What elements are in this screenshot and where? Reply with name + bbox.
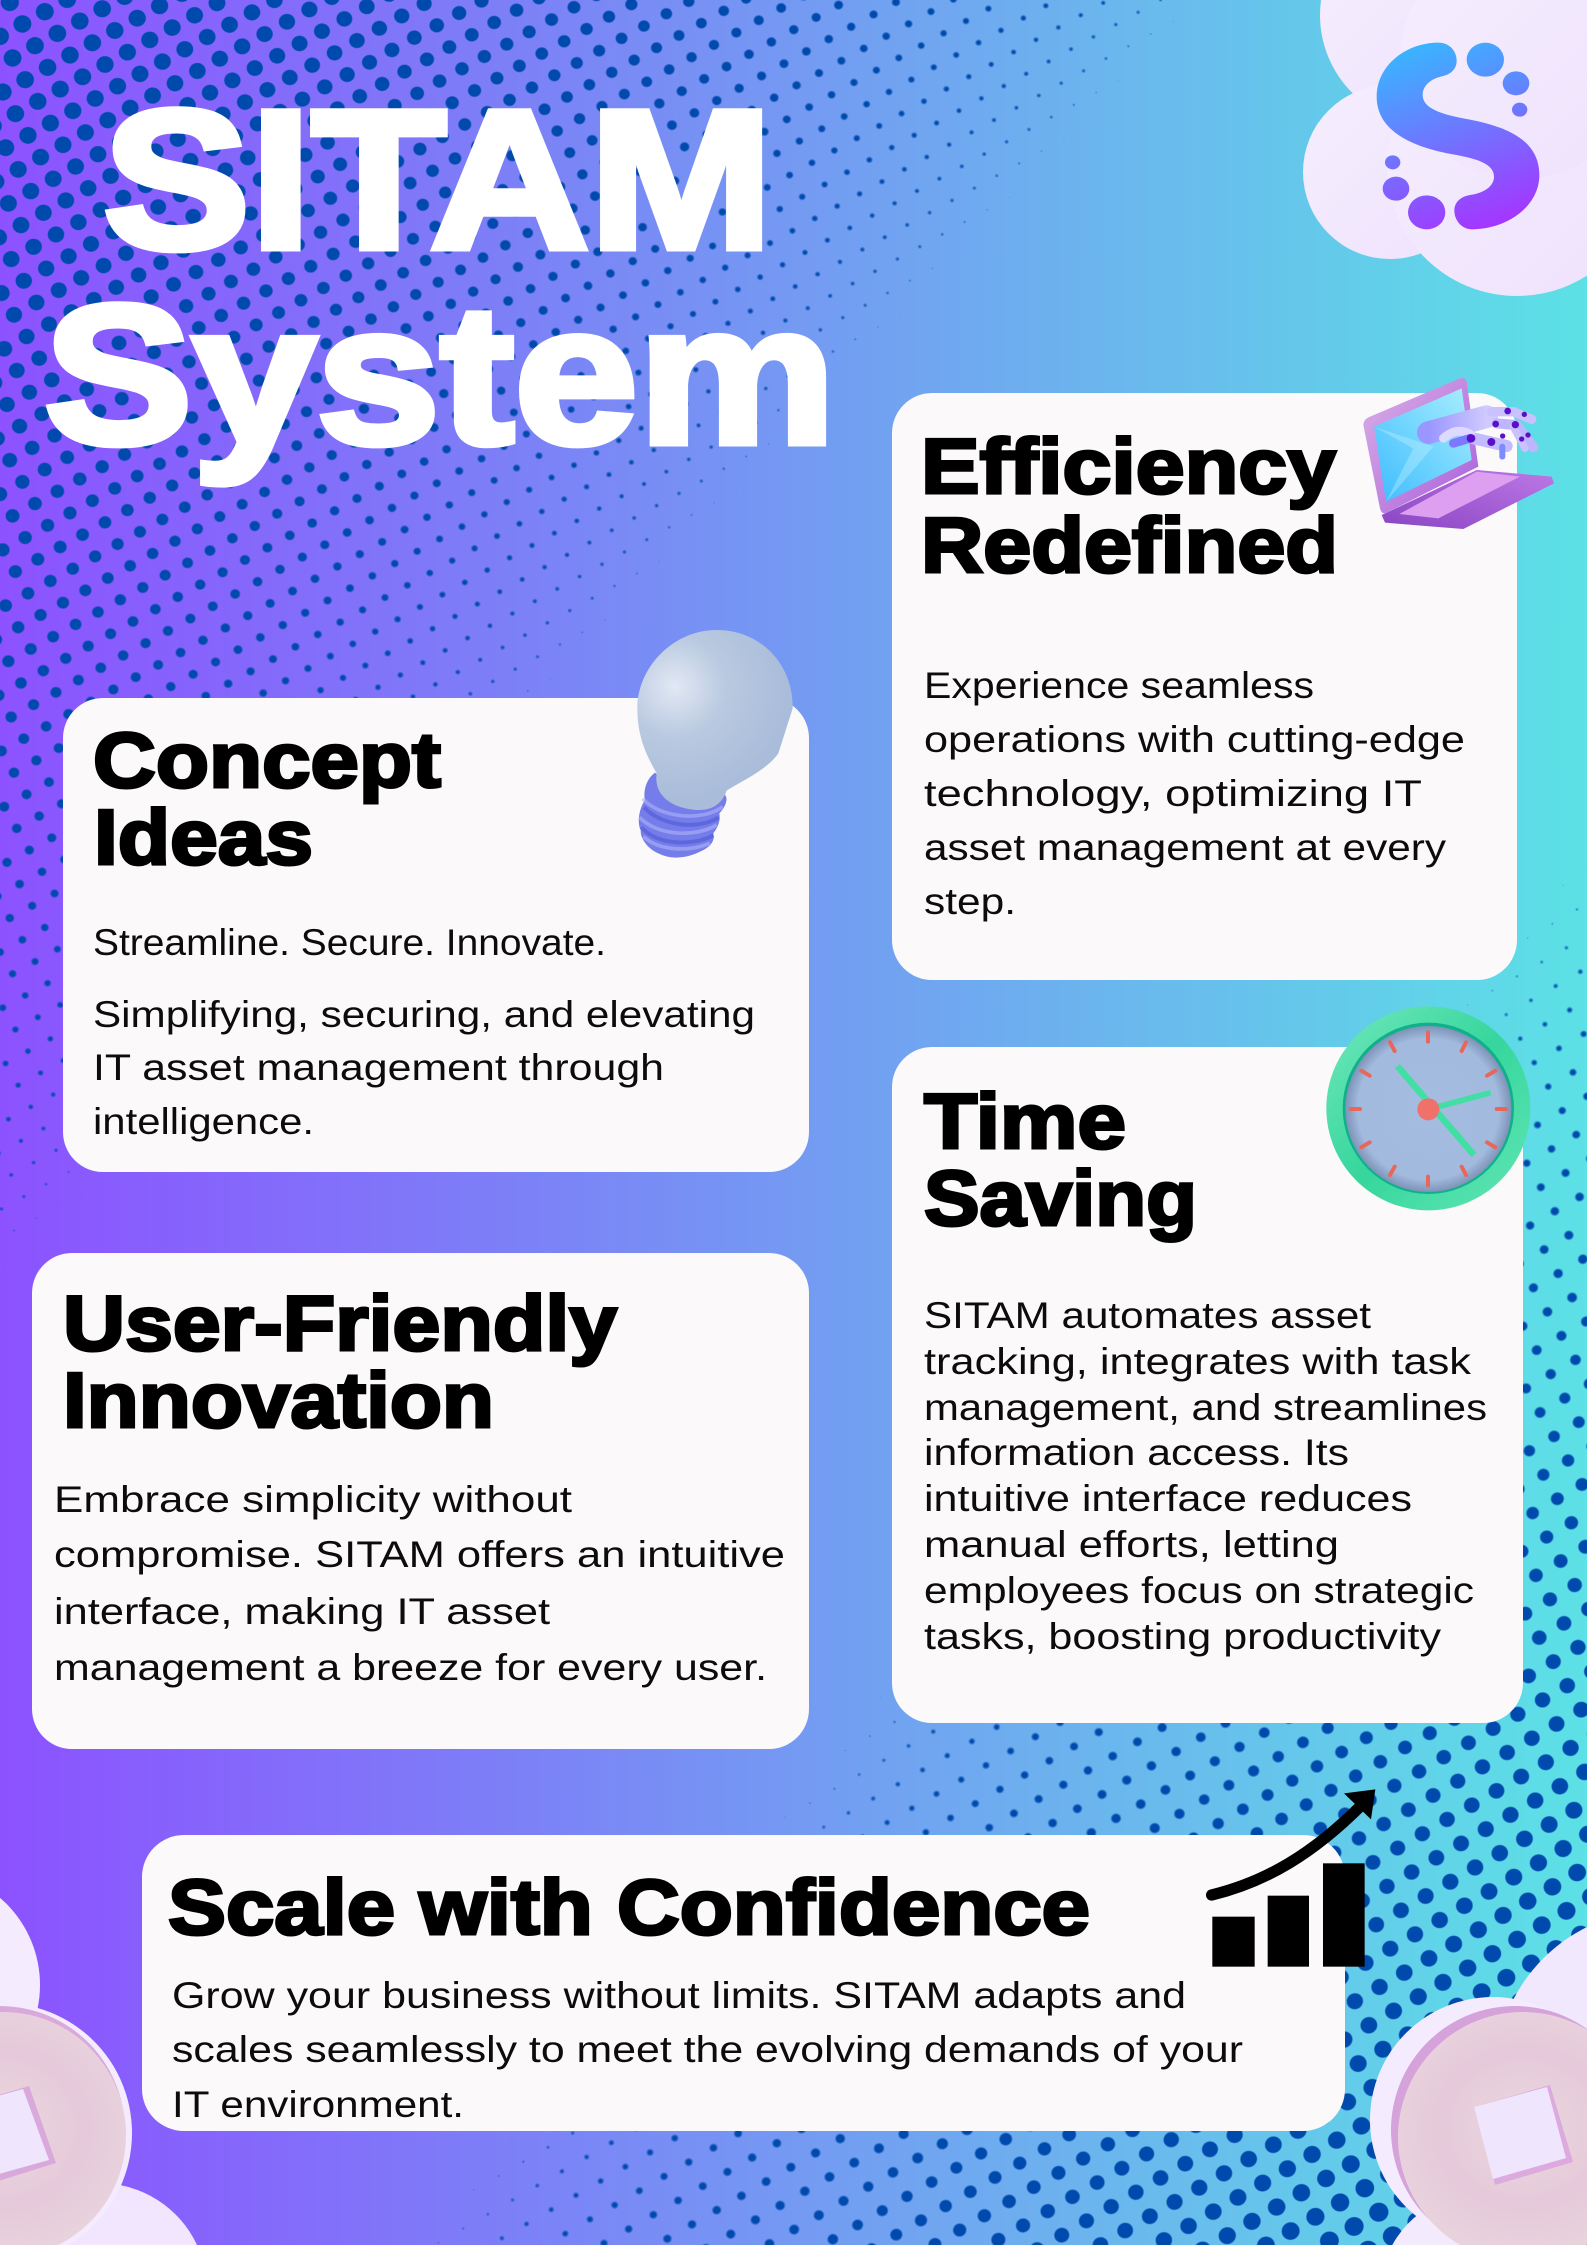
heading: concept ideas: Concept	[93, 716, 441, 804]
text: time saving body: SITAM automates asset	[924, 1295, 1372, 1336]
text: efficiency body: technology, optimizing IT	[924, 773, 1422, 814]
heading: concept ideas	[93, 716, 441, 881]
heading: concept ideas: Ideas	[94, 793, 313, 881]
panel: efficiency redefined	[892, 393, 1517, 980]
heading: user-friendly innovation: Innovation	[63, 1356, 494, 1444]
text: time saving body	[924, 1295, 1487, 1657]
heading: user-friendly innovation: User-Friendly	[63, 1279, 617, 1367]
text: scale body: IT environment.	[172, 2084, 464, 2125]
heading: scale with confidence: Scale with Confidence	[168, 1863, 1090, 1951]
text: efficiency body	[924, 665, 1465, 922]
text: time saving body: information access. Its	[924, 1432, 1349, 1473]
text: user-friendly body: management a breeze for every user.	[54, 1647, 767, 1688]
heading: time saving	[924, 1077, 1197, 1242]
logo badge	[1303, 0, 1587, 296]
logo cloud	[1303, 0, 1587, 296]
title: System	[44, 264, 836, 485]
text: time saving body: employees focus on strategic	[924, 1570, 1474, 1611]
heading: time saving: Saving	[924, 1154, 1197, 1242]
text: time saving body: tasks, boosting productivity	[924, 1616, 1442, 1657]
text: scale body: Grow your business without limits. SITAM adapts and	[172, 1975, 1186, 2016]
text: user-friendly body: Embrace simplicity without	[54, 1479, 573, 1520]
text: time saving body: tracking, integrates with task	[924, 1341, 1472, 1382]
title: SITAM	[103, 69, 773, 290]
text: user-friendly body: compromise. SITAM offers an intuitive	[54, 1534, 785, 1575]
text: efficiency body: operations with cutting-edge	[924, 719, 1465, 760]
panel: concept ideas	[63, 698, 809, 1172]
text: time saving body: intuitive interface reduces	[924, 1478, 1412, 1519]
text: time saving body: management, and streamlines	[924, 1387, 1487, 1428]
text: concept body: intelligence.	[93, 1101, 314, 1142]
text: efficiency body: asset management at every	[924, 827, 1447, 868]
heading: efficiency redefined	[921, 422, 1338, 589]
heading: efficiency redefined: Efficiency	[921, 422, 1336, 510]
icon: light bulb	[637, 630, 793, 858]
text: scale body	[172, 1975, 1243, 2125]
panel: scale with confidence	[142, 1835, 1345, 2131]
halftone dots: bottom right	[437, 870, 1587, 2245]
logo S mark	[1377, 43, 1539, 229]
text: concept body: IT asset management through	[93, 1047, 664, 1088]
text: time saving body: manual efforts, letting	[924, 1524, 1339, 1565]
text: concept body	[93, 922, 755, 1142]
text: scale body: scales seamlessly to meet the evolving demands of your	[172, 2029, 1243, 2070]
panel: user-friendly innovation	[32, 1253, 809, 1749]
title	[44, 69, 836, 485]
decoration: bottom left coin	[0, 1870, 197, 2245]
panel: time saving	[892, 1047, 1523, 1723]
text: efficiency body: step.	[924, 881, 1016, 922]
heading: time saving: Time	[924, 1077, 1126, 1165]
icon: growth chart with arrow	[1212, 1789, 1375, 1967]
text: user-friendly body: interface, making IT asset	[54, 1591, 551, 1632]
heading: user-friendly innovation	[63, 1279, 617, 1444]
halftone dots: top left	[0, 0, 1196, 1265]
decoration: bottom right coin	[1370, 1910, 1587, 2245]
text: concept body: Streamline. Secure. Innovate.	[93, 922, 606, 963]
icon: clock	[1326, 1006, 1530, 1210]
text: efficiency body: Experience seamless	[924, 665, 1314, 706]
text: user-friendly body	[54, 1479, 785, 1688]
icon: laptop with robot hand	[1363, 378, 1554, 529]
heading: efficiency redefined: Redefined	[921, 501, 1338, 589]
text: concept body: Simplifying, securing, and elevating	[93, 994, 755, 1035]
